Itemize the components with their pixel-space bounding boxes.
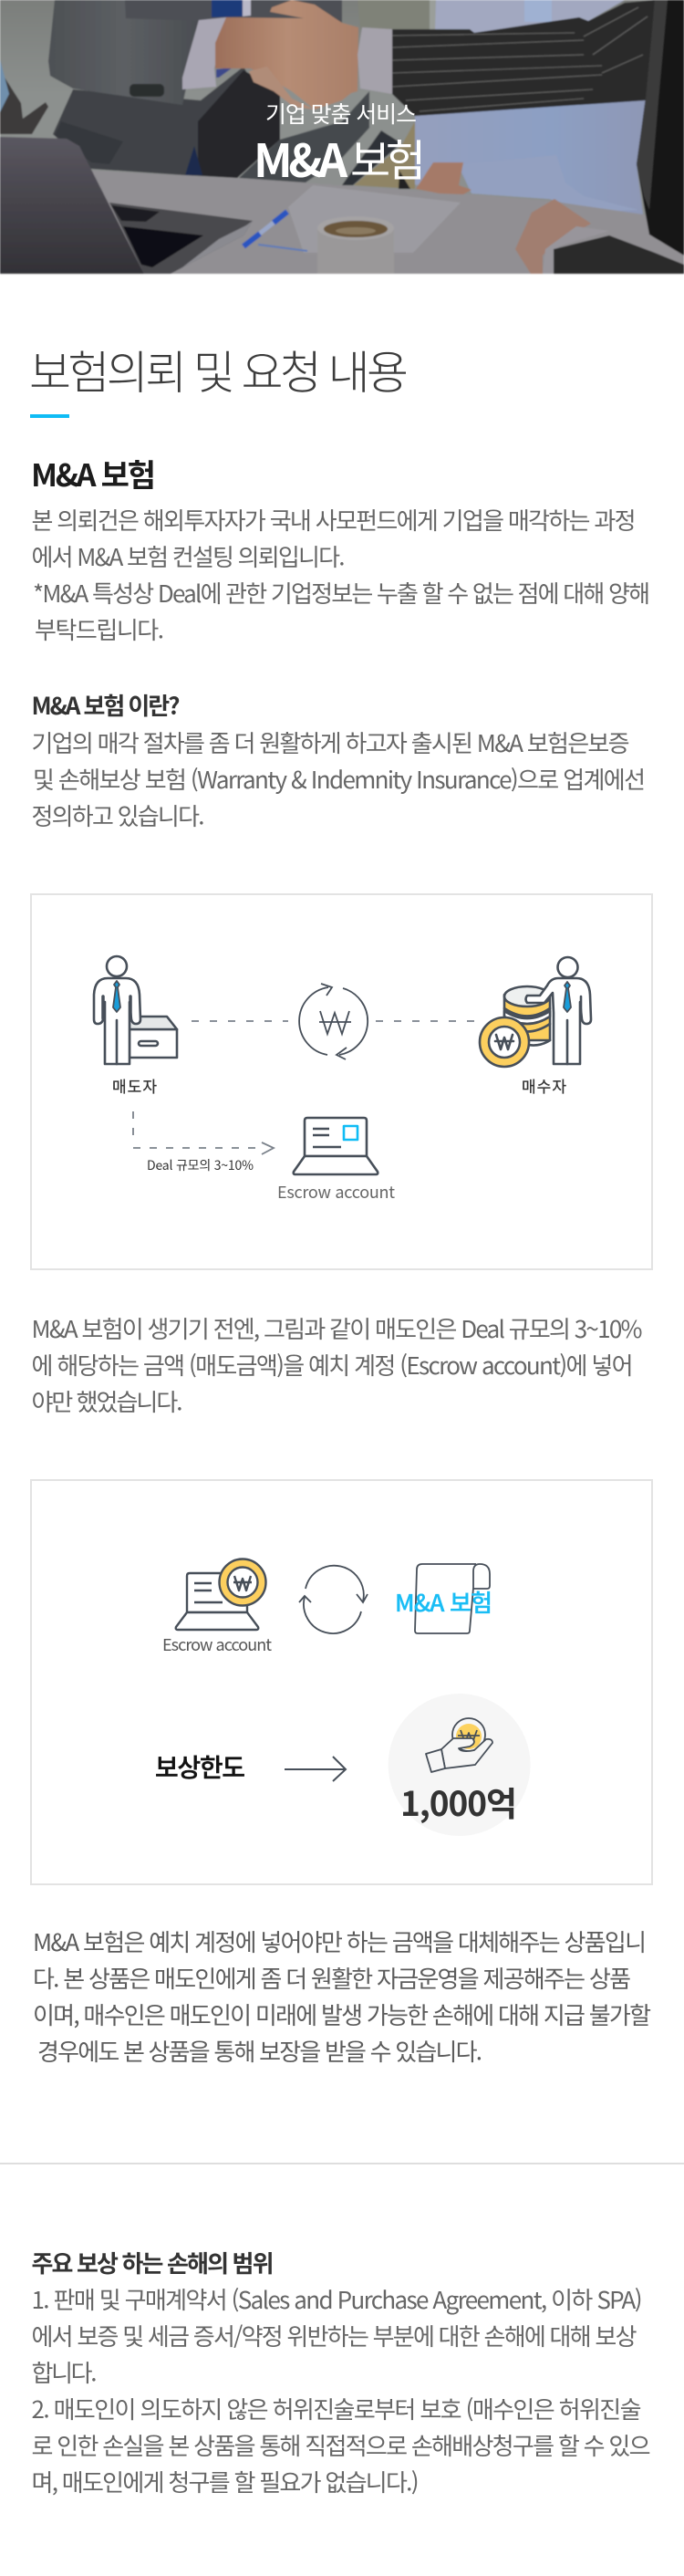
left sleeve <box>48 0 201 105</box>
suit body <box>53 67 280 178</box>
table <box>0 171 684 274</box>
text block: insurance explanation: M&A 보험은 예치 계정에 넣어야만 하는 금액을 대체해주는 상품입니 <box>33 1924 647 1958</box>
hero title <box>254 125 426 191</box>
text block: request description: *M&A 특성상 Deal에 관한 기업정보는 누출 할 수 없는 점에 대해 양해 <box>33 576 650 610</box>
text block: compensation list: 로 인한 손실을 본 상품을 통해 직접적으로 손해배상청구를 할 수 있으 <box>31 2428 651 2462</box>
text block: before M&A insurance: 에 해당하는 금액 (매도금액)을 예치 계정 (Escrow account)에 넣어 <box>31 1348 633 1382</box>
arrow: limit <box>285 1757 346 1781</box>
right cuff <box>358 27 392 94</box>
icon: seller with box <box>94 956 177 1064</box>
label: compensation limit: 보상한도 <box>155 1748 245 1785</box>
text block: request description <box>31 503 650 646</box>
laptop lid <box>0 137 144 274</box>
jacket pocket <box>55 121 123 164</box>
icon: cycle arrows <box>299 1566 368 1633</box>
icon: laptop <box>294 1118 378 1174</box>
icon: buyer with coins <box>480 957 591 1067</box>
text block: definition: 기업의 매각 절차를 좀 더 원활하게 하고자 출시된 M&A 보험은보증 <box>31 725 629 759</box>
section heading: 보험의뢰 및 요청 내용 <box>29 337 409 402</box>
divider <box>0 2163 684 2164</box>
text block: insurance explanation <box>33 1924 651 2068</box>
text block: before M&A insurance: M&A 보험이 생기기 전엔, 그림과 같이 매도인은 Deal 규모의 3~10% <box>31 1311 642 1345</box>
lapel <box>251 0 283 16</box>
panel: escrow diagram <box>31 894 652 1269</box>
left cuff <box>182 17 226 89</box>
text block: compensation list <box>31 2282 651 2498</box>
text block: definition <box>31 725 646 832</box>
dashed line: seller to exchange <box>192 1020 288 1022</box>
suit upper body <box>125 0 342 27</box>
lower right sleeve <box>554 235 684 274</box>
laptop deck <box>109 203 253 274</box>
text block: compensation list: 1. 판매 및 구매계약서 (Sales and Purchase Agreement, 이하 SPA) <box>31 2282 642 2316</box>
text block: insurance explanation: 다. 본 상품은 매도인에게 좀 더 원활한 자금운영을 제공해주는 상품 <box>33 1961 631 1995</box>
icon: laptop with coin <box>176 1559 266 1630</box>
far right dark <box>637 0 684 256</box>
text block: request description: 부탁드립니다. <box>35 612 164 646</box>
subheading: M&A 보험 이란?: M&A 보험 이란? <box>31 688 181 722</box>
heading accent bar <box>30 414 69 418</box>
label: seller: 매도자 <box>112 1074 157 1097</box>
tablet <box>342 130 401 185</box>
label: escrow account: Escrow account <box>277 1180 395 1204</box>
chair <box>0 70 48 134</box>
panel: insurance replaces escrow <box>31 1480 652 1884</box>
text block: request description: 에서 M&A 보험 컨설팅 의뢰입니다. <box>31 539 345 573</box>
top shirt <box>435 0 625 33</box>
subheading: scope of compensated losses: 주요 보상 하는 손해의 범위 <box>31 2246 274 2279</box>
hero title: 보험 <box>350 125 426 189</box>
inner dark <box>198 70 280 178</box>
lower right cuff <box>543 226 609 274</box>
limit badge circle <box>389 1694 531 1836</box>
value: 1,000억: 1,000억 <box>400 1777 517 1826</box>
text block: compensation list: 합니다. <box>31 2355 97 2389</box>
hero title: M&A <box>254 125 348 191</box>
label: escrow account: Escrow account <box>162 1632 272 1656</box>
far wall <box>358 0 436 29</box>
icon: hand holding coin <box>426 1718 492 1772</box>
text block: insurance explanation: 경우에도 본 상품을 통해 보장을 받을 수 있습니다. <box>37 2034 482 2068</box>
text block: compensation list: 며, 매도인에게 청구를 할 필요가 없습니다.) <box>31 2465 420 2498</box>
text block: before M&A insurance: 야만 했었습니다. <box>31 1384 182 1418</box>
tie <box>212 0 243 17</box>
small hand <box>416 162 472 194</box>
text block: compensation list: 2. 매도인이 의도하지 않은 허위진술로부터 보호 (매수인은 허위진술 <box>31 2392 642 2425</box>
subheading: M&A 보험: M&A 보험 <box>31 451 156 495</box>
text block: compensation list: 에서 보증 및 세금 증서/약정 위반하는 부분에 대한 손해에 대해 보상 <box>31 2319 637 2352</box>
text block: before M&A insurance <box>31 1311 642 1418</box>
arrow: seller to escrow <box>133 1111 274 1154</box>
label: M&A insurance: M&A 보험 <box>395 1585 492 1619</box>
text block: definition: 정의하고 있습니다. <box>31 798 204 832</box>
buttons <box>130 84 164 97</box>
text block: definition: 및 손해보상 보험 (Warranty & Indemnity Insurance)으로 업계에선 <box>33 762 646 796</box>
cup <box>317 228 394 274</box>
papers <box>288 185 461 253</box>
text block: request description: 본 의뢰건은 해외투자자가 국내 사모펀드에게 기업을 매각하는 과정 <box>31 503 637 537</box>
icon: policy document <box>415 1564 490 1633</box>
hand center <box>215 0 358 110</box>
hero banner: handshake photo <box>0 0 684 274</box>
dashed line: exchange to buyer <box>376 1020 474 1022</box>
label: deal size: Deal 규모의 3~10% <box>147 1156 254 1174</box>
hero subtitle: 기업 맞춤 서비스 <box>265 97 417 130</box>
lower right hand <box>515 199 591 274</box>
right sleeve <box>392 0 655 116</box>
lower shirt <box>408 99 646 214</box>
icon: won exchange cycle <box>299 984 368 1059</box>
grey forearm <box>239 91 369 183</box>
text block: insurance explanation: 이며, 매수인은 매도인이 미래에 발생 가능한 손해에 대해 지급 불가할 <box>33 1997 651 2031</box>
label: buyer: 매수자 <box>522 1074 566 1097</box>
pen <box>244 212 287 246</box>
